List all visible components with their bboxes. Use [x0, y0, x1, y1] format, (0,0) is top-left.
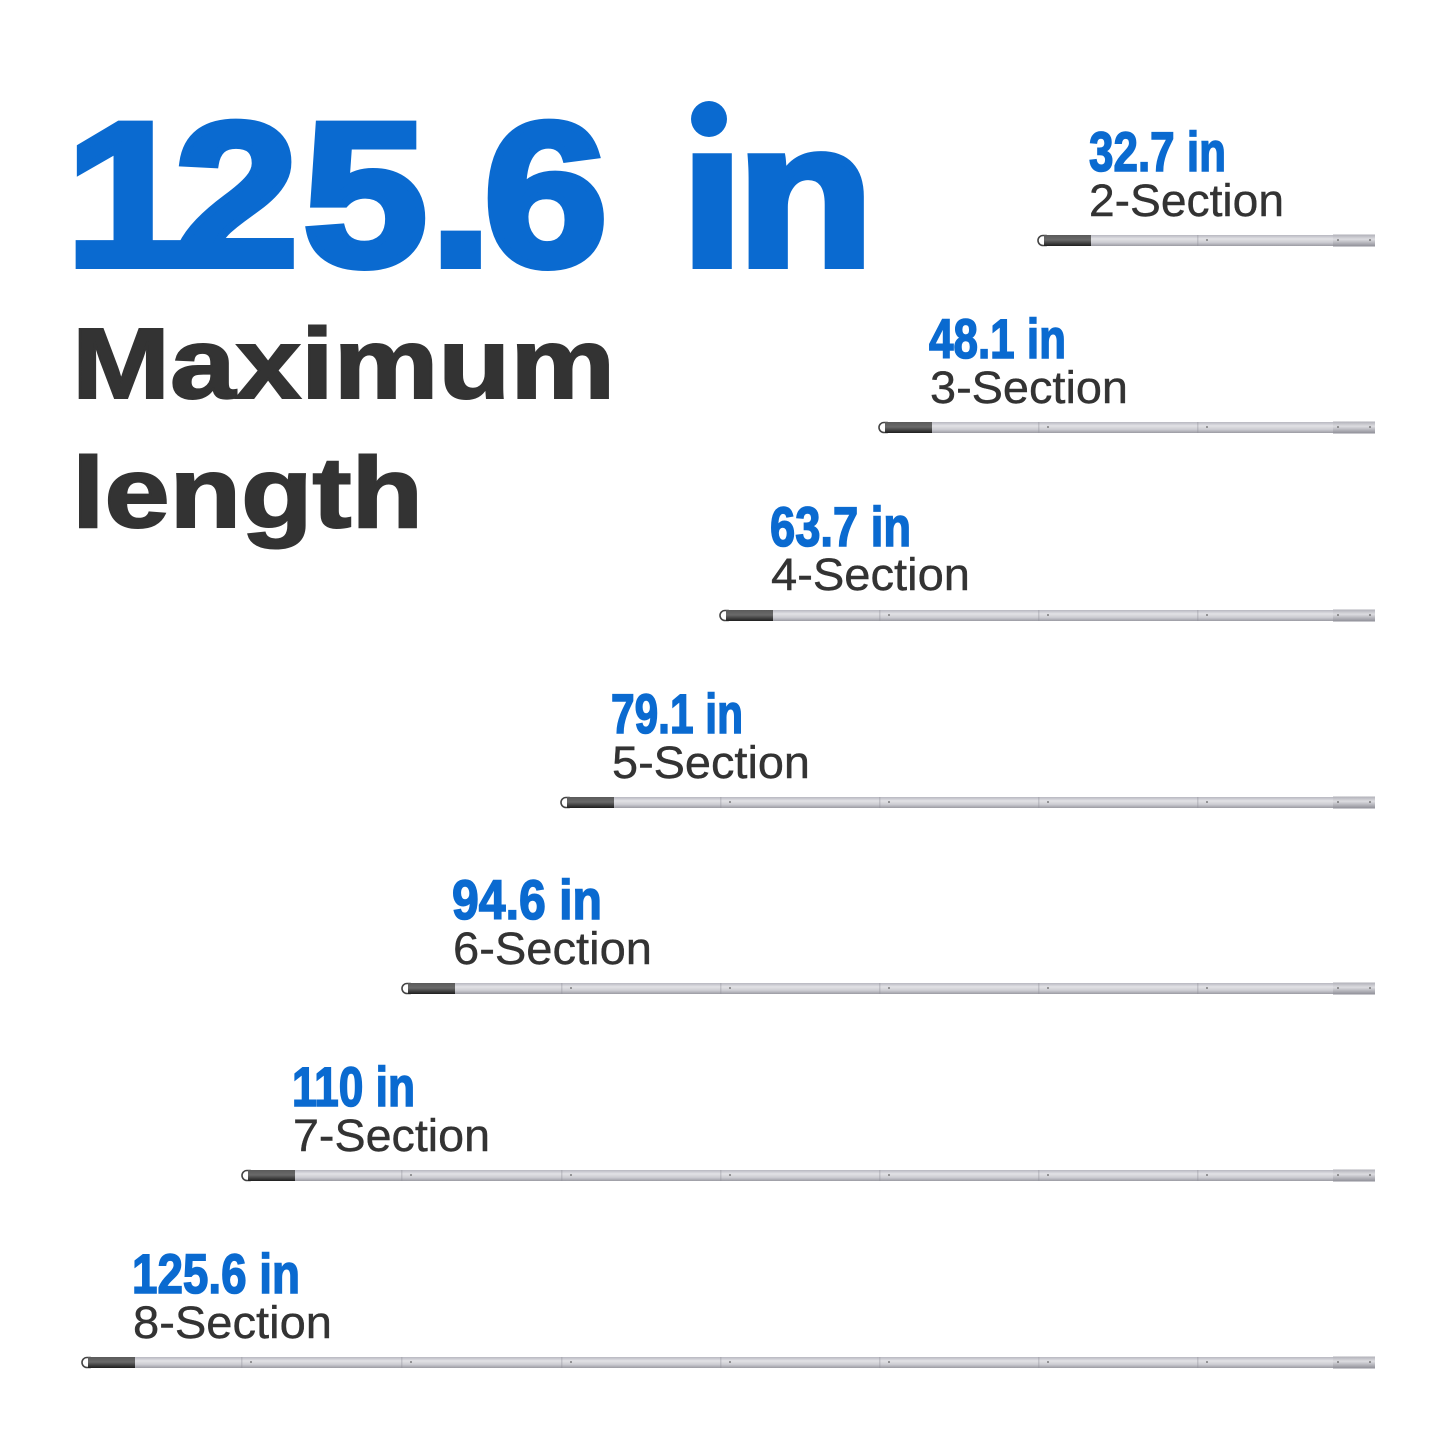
row: 3-Section 48.1 in	[879, 307, 1375, 434]
title: 125.6 in: 125.6 in	[66, 81, 873, 309]
section label: 3-Section	[930, 362, 1128, 413]
section label: 8-Section	[133, 1297, 332, 1348]
row: 6-Section 94.6 in	[402, 868, 1375, 994]
row: 7-Section 110 in	[242, 1055, 1375, 1182]
section label: 2-Section	[1089, 175, 1284, 226]
pole	[720, 610, 1375, 622]
pole	[879, 422, 1375, 434]
row: 2-Section 32.7 in	[1038, 120, 1375, 246]
section label: 6-Section	[453, 923, 652, 974]
pole	[561, 796, 1375, 808]
length label: 94.6 in	[452, 868, 602, 931]
row: 4-Section 63.7 in	[720, 495, 1375, 622]
length label: 79.1 in	[611, 682, 743, 745]
section label: 5-Section	[612, 737, 810, 788]
subtitle: Maximum length: length	[72, 437, 423, 549]
section label: 4-Section	[771, 549, 970, 600]
length label: 110 in	[292, 1055, 415, 1118]
length label: 48.1 in	[929, 307, 1066, 370]
length label: 125.6 in	[132, 1242, 300, 1305]
length label: 32.7 in	[1089, 120, 1226, 183]
pole	[1038, 234, 1375, 246]
pole	[242, 1170, 1375, 1182]
pole	[402, 982, 1375, 994]
subtitle: Maximum length: Maximum	[72, 308, 615, 420]
row: 8-Section 125.6 in	[82, 1242, 1375, 1368]
section label: 7-Section	[293, 1110, 490, 1161]
length label: 63.7 in	[770, 495, 911, 558]
pole	[82, 1356, 1375, 1368]
subtitle: Maximum length	[72, 308, 615, 549]
row: 5-Section 79.1 in	[561, 682, 1375, 808]
